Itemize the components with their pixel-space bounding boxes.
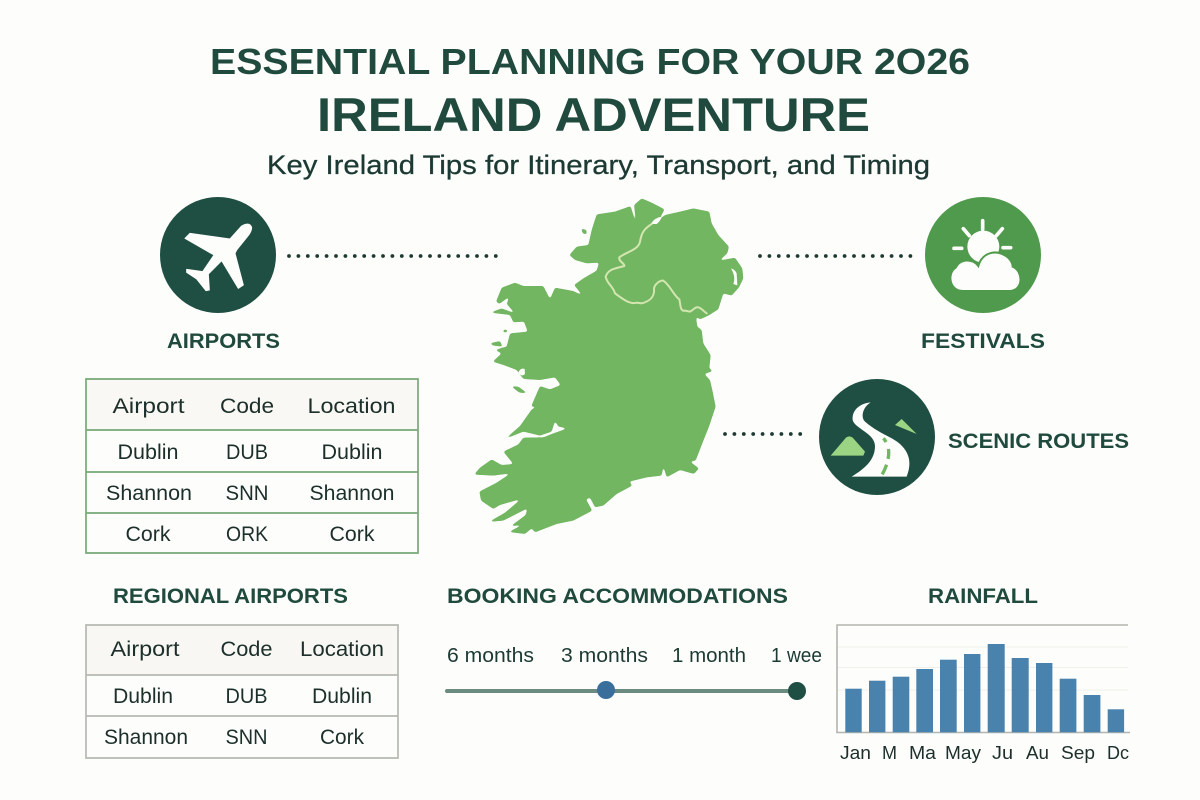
bar chart: rainfall: Sep	[1061, 743, 1095, 763]
bar chart: rainfall: Jan	[840, 743, 871, 763]
table: regional airports: Airport	[110, 638, 180, 661]
icon: scenic road	[819, 379, 935, 495]
timeline: booking lead times: 1 wee	[771, 645, 822, 667]
table: regional airports: SNN	[226, 726, 268, 749]
bar chart: rainfall	[837, 625, 1130, 763]
timeline: booking lead times	[447, 645, 822, 700]
bar chart: rainfall: Ma	[909, 743, 937, 763]
subtitle: Key Ireland Tips for Itinerary, Transport, and Timing	[267, 150, 930, 180]
table: regional airports: Dublin	[113, 685, 173, 708]
table: airports: Cork	[330, 523, 375, 546]
table: regional airports: Dublin	[312, 685, 372, 708]
timeline: booking lead times: 3 months	[561, 645, 648, 667]
label: scenic routes: SCENIC ROUTES	[948, 430, 1129, 453]
title line 2: IRELAND ADVENTURE	[317, 88, 870, 141]
loughs	[518, 217, 737, 375]
table: airports: Dublin	[118, 441, 178, 464]
table: regional airports: DUB	[226, 685, 268, 708]
table: airports: DUB	[226, 441, 268, 464]
table: airports: ORK	[226, 523, 268, 546]
table: airports: Shannon	[106, 482, 192, 505]
bar chart: rainfall: May	[945, 743, 981, 763]
connector: festivals to map	[760, 254, 915, 258]
table: airports: Airport	[112, 395, 185, 418]
bar chart: rainfall: Dc	[1107, 743, 1129, 763]
table: airports: Shannon	[310, 482, 394, 505]
table: airports: Code	[220, 395, 274, 418]
table: airports: Cork	[126, 523, 171, 546]
bar chart: rainfall: Ju	[992, 743, 1013, 763]
table: regional airports: Shannon	[104, 726, 188, 749]
timeline: booking lead times: 1 month	[672, 645, 746, 667]
heading: rainfall: RAINFALL	[928, 585, 1038, 608]
table: regional airports: Location	[300, 638, 384, 661]
title block	[210, 41, 970, 180]
bar chart: rainfall: Au	[1026, 743, 1049, 763]
heading: regional airports: REGIONAL AIRPORTS	[113, 585, 348, 608]
table: regional airports: Cork	[320, 726, 364, 749]
table: airports: SNN	[226, 482, 268, 505]
bar chart: rainfall: M	[882, 743, 897, 763]
table: airports: Dublin	[322, 441, 382, 464]
table: airports: Location	[308, 395, 396, 418]
label: airports: AIRPORTS	[167, 330, 280, 353]
icon: airplane	[160, 197, 276, 313]
table: airports	[86, 379, 418, 553]
timeline: booking lead times: 6 months	[447, 645, 534, 667]
connector: airports to map	[289, 254, 501, 258]
map of Ireland	[474, 198, 743, 534]
heading: booking accommodations: BOOKING ACCOMMODATIONS	[447, 585, 788, 608]
label: festivals: FESTIVALS	[921, 330, 1045, 353]
connector: scenic routes to map	[725, 432, 808, 436]
icon: sun and cloud	[925, 197, 1041, 313]
islands	[489, 228, 587, 393]
border with Northern Ireland	[606, 224, 707, 313]
title line 1: ESSENTIAL PLANNING FOR YOUR 2O26	[210, 41, 970, 82]
table: regional airports: Code	[220, 638, 272, 661]
table: regional airports	[86, 625, 398, 758]
